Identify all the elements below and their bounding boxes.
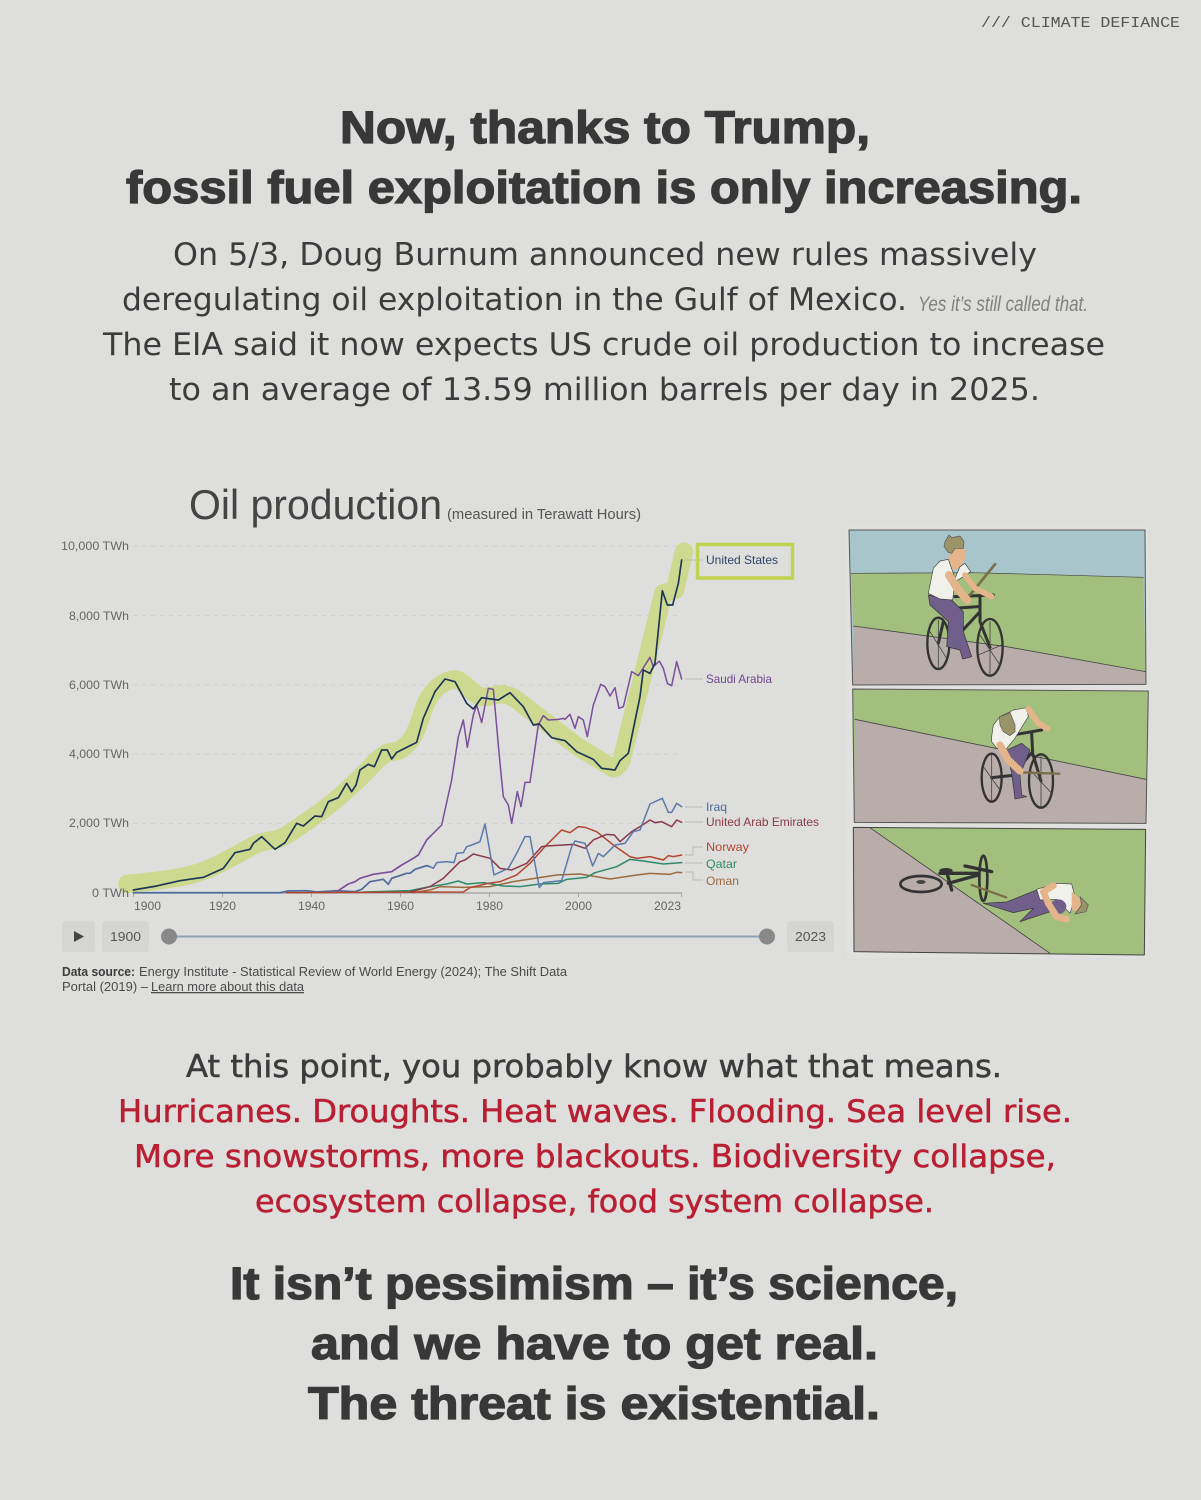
intro text block: The EIA said it now expects US crude oil production to increase	[102, 327, 1105, 363]
series labels: Qatar	[706, 857, 737, 871]
series labels: United Arab Emirates	[706, 815, 819, 829]
chart title: Oil production	[189, 481, 442, 528]
line chart: oil production: 10,000 TWh	[61, 539, 129, 553]
intro text block: On 5/3, Doug Burnum announced new rules massively	[173, 237, 1037, 273]
line chart: oil production: 2,000 TWh	[69, 816, 129, 830]
brand tag: /// CLIMATE DEFIANCE	[981, 15, 1180, 32]
data source note: Energy Institute - Statistical Review of World Energy (2024); The Shift Data	[139, 965, 567, 979]
closing statement	[230, 1258, 958, 1429]
chart title	[189, 481, 641, 528]
line chart: oil production: 1940	[298, 899, 325, 913]
closing statement: The threat is existential.	[308, 1378, 880, 1429]
timeline slider	[62, 921, 834, 952]
intro text block: to an average of 13.59 million barrels per day in 2025.	[169, 372, 1040, 408]
consequences text block: ecosystem collapse, food system collapse.	[255, 1184, 934, 1220]
intro text block: deregulating oil exploitation in the Gulf of Mexico.	[122, 282, 907, 318]
intro text block: Yes it’s still called that.	[918, 293, 1088, 316]
title: Now, thanks to Trump,	[340, 102, 870, 153]
intro text block	[102, 237, 1105, 408]
consequences text block: At this point, you probably know what that means.	[186, 1049, 1002, 1085]
line chart: oil production: 8,000 TWh	[69, 609, 129, 623]
series labels: United States	[706, 553, 778, 567]
series labels	[698, 544, 819, 888]
line chart: oil production: 1960	[387, 899, 414, 913]
consequences text block: More snowstorms, more blackouts. Biodiversity collapse,	[134, 1139, 1056, 1175]
series labels: Saudi Arabia	[706, 672, 772, 686]
data source note: Portal (2019) –	[62, 980, 148, 994]
line chart: oil production: 0 TWh	[92, 886, 129, 900]
series labels: Oman	[706, 874, 739, 888]
closing statement: It isn’t pessimism – it’s science,	[230, 1258, 958, 1309]
timeline slider: 2023	[795, 929, 826, 944]
panel 3: rider crashed on grass	[853, 827, 1146, 955]
consequences text block: Hurricanes. Droughts. Heat waves. Flooding. Sea level rise.	[118, 1094, 1072, 1130]
data source note	[62, 965, 567, 994]
line chart: oil production: 2023	[654, 899, 681, 913]
title	[126, 102, 1082, 213]
series labels: Iraq	[706, 800, 727, 814]
panel 1: rider with stick	[849, 530, 1146, 685]
comic panels	[847, 527, 1148, 958]
data source note: Data source:	[62, 965, 135, 979]
line chart: oil production: 1900	[134, 899, 161, 913]
line chart: oil production: 1980	[476, 899, 503, 913]
series labels: Norway	[706, 840, 749, 854]
title: fossil fuel exploitation is only increasing.	[126, 162, 1082, 213]
timeline slider: 1900	[110, 929, 141, 944]
line chart: oil production	[61, 539, 703, 913]
panel 2: stick in the spokes	[853, 689, 1148, 823]
line chart: oil production: 4,000 TWh	[69, 747, 129, 761]
chart title: (measured in Terawatt Hours)	[447, 506, 641, 523]
consequences text block	[118, 1049, 1072, 1220]
line chart: oil production: 6,000 TWh	[69, 678, 129, 692]
line chart: oil production: 2000	[565, 899, 592, 913]
line chart: oil production: 1920	[209, 899, 236, 913]
closing statement: and we have to get real.	[311, 1318, 878, 1369]
data source note: Learn more about this data	[151, 980, 304, 994]
